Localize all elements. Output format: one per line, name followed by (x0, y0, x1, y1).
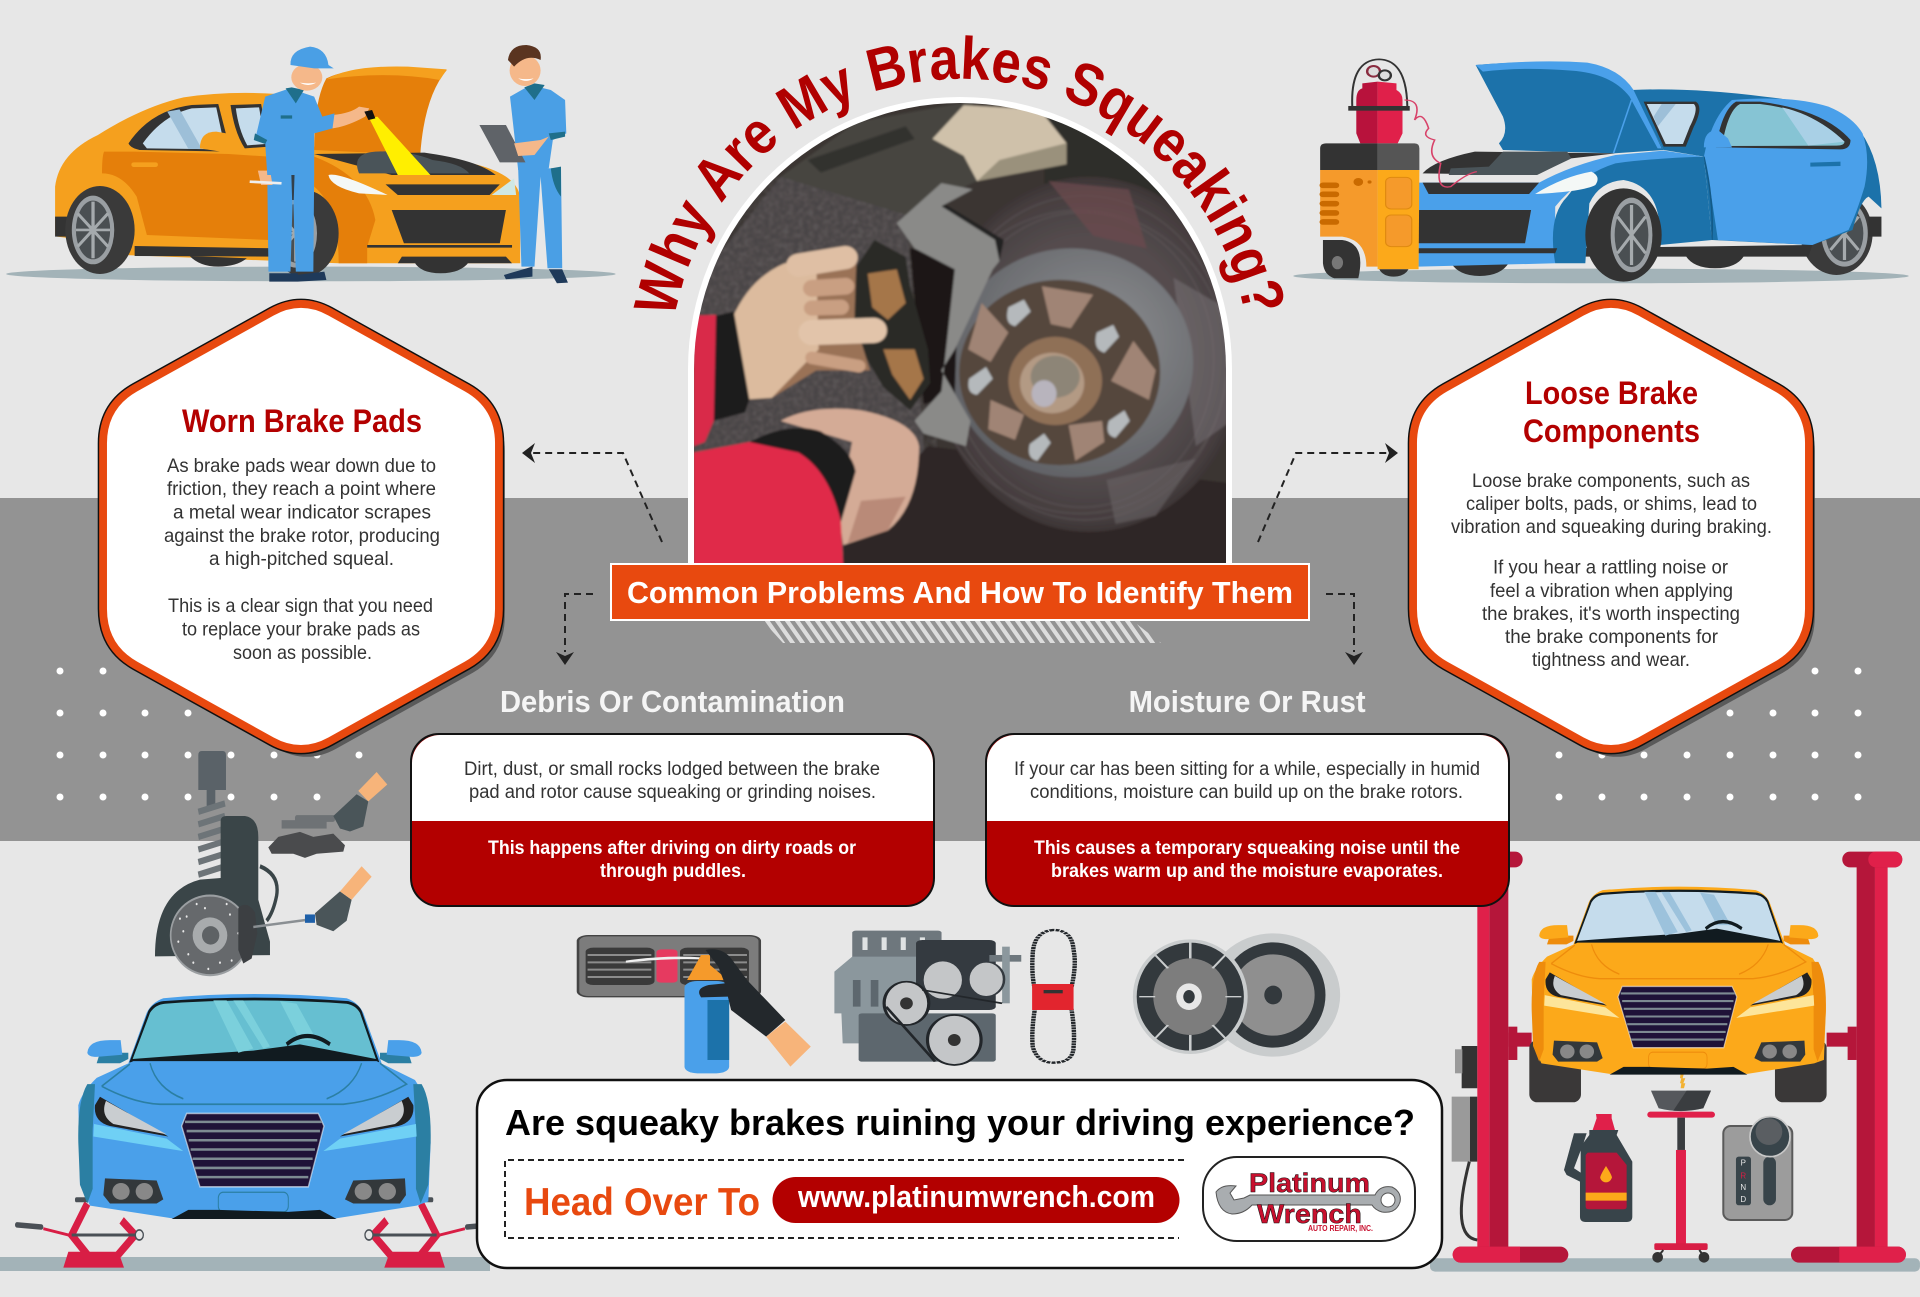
panel: worn brake pads hexagon (103, 304, 505, 757)
card: moisture: If your car has been sitting for a while, especially in humid (1014, 759, 1480, 780)
panel: loose brake components hexagon (1413, 304, 1815, 757)
dot grid left (56, 668, 362, 800)
illustration: blue car with AC service cart (1293, 59, 1909, 283)
dot grid right (1556, 668, 1862, 800)
text: worn brake pads description: against the brake rotor, producing (164, 525, 440, 547)
text: worn brake pads description (164, 455, 440, 664)
text: question: Are squeaky brakes ruining your driving experience? (505, 1102, 1415, 1143)
banner: common problems (611, 564, 1309, 620)
illustration: blue car on jacks (0, 994, 493, 1271)
arrow: banner to moisture (1326, 594, 1363, 665)
logo: platinum wrench: AUTO REPAIR, INC. (1308, 1224, 1373, 1233)
text: loose brake components description: the brakes, it's worth inspecting (1482, 603, 1740, 625)
illustration: car lift with yellow car: P (1741, 1158, 1746, 1167)
card: debris (411, 734, 934, 906)
heading: loose brake components (1523, 375, 1700, 449)
grey band (0, 498, 1920, 841)
text: loose brake components description: caliper bolts, pads, or shims, lead to (1466, 493, 1757, 515)
icon: spray can at dashboard vent (578, 936, 811, 1073)
text: loose brake components description: If you hear a rattling noise or (1493, 556, 1728, 578)
text: loose brake components description: feel a vibration when applying (1490, 580, 1733, 602)
panel: moisture or rust (986, 684, 1509, 906)
text: worn brake pads description: soon as possible. (233, 642, 372, 664)
arrow: banner to debris (556, 594, 593, 665)
text: worn brake pads description: a high-pitched squeal. (209, 548, 394, 570)
photo arch: hands replacing brake pad (687, 97, 1245, 568)
text: loose brake components description (1451, 470, 1772, 671)
logo: platinum wrench (1203, 1157, 1415, 1241)
card: debris: through puddles. (600, 861, 746, 882)
heading: loose brake components: Loose Brake (1525, 375, 1698, 411)
heading: moisture: Moisture Or Rust (1129, 684, 1366, 719)
card: debris: Dirt, dust, or small rocks lodged between the brake (464, 759, 880, 780)
card: moisture: This causes a temporary squeaking noise until the (1034, 838, 1460, 859)
banner: common problems: Common Problems And How To Identify Them (627, 575, 1293, 610)
card: moisture: conditions, moisture can build up on the brake rotors. (1030, 782, 1463, 803)
card: moisture (986, 734, 1509, 906)
text: loose brake components description: vibration and squeaking during braking. (1451, 516, 1772, 538)
panel: debris or contamination (411, 684, 934, 906)
arrow: centre to worn brake pads (522, 443, 662, 542)
dashed frame (505, 1160, 1184, 1238)
text: worn brake pads description: to replace your brake pads as (182, 618, 420, 640)
text: worn brake pads description: friction, they reach a point where (167, 478, 436, 500)
heading: worn brake pads: Worn Brake Pads (182, 403, 422, 439)
text: loose brake components description: tightness and wear. (1532, 649, 1690, 671)
url pill: www.platinumwrench.com (797, 1179, 1155, 1214)
heading: debris: Debris Or Contamination (500, 684, 845, 719)
text: head over to: Head Over To (524, 1181, 760, 1224)
text: loose brake components description: Loose brake components, such as (1472, 470, 1750, 492)
card: debris: pad and rotor cause squeaking or grinding noises. (469, 782, 876, 803)
hatch decoration under banner (763, 621, 1161, 643)
illustration: mechanics inspecting orange car (6, 45, 616, 283)
illustration: brake assembly with gloved hands (155, 751, 387, 975)
title on arc: Why Are My Brakes Squeaking? (634, 35, 1284, 310)
illustration: car lift with yellow car: N (1740, 1183, 1746, 1192)
text: worn brake pads description: a metal wear indicator scrapes (173, 502, 431, 524)
logo: platinum wrench: Platinum (1249, 1168, 1370, 1198)
logo: platinum wrench: Wrench (1257, 1199, 1362, 1229)
panel: call to action (477, 1080, 1442, 1268)
illustration: car lift with yellow car (1430, 852, 1920, 1272)
card: debris: This happens after driving on dirty roads or (488, 838, 857, 859)
text: worn brake pads description: As brake pads wear down due to (167, 455, 436, 477)
icon: engine and belt (834, 930, 1075, 1065)
text: loose brake components description: the brake components for (1505, 626, 1718, 648)
heading: loose brake components: Components (1523, 413, 1700, 449)
illustration: car lift with yellow car: D (1740, 1195, 1746, 1204)
icon: clutch plates (1133, 933, 1340, 1057)
card: moisture: brakes warm up and the moisture evaporates. (1051, 861, 1443, 882)
illustration: car lift with yellow car: R (1740, 1172, 1746, 1181)
text: worn brake pads description: This is a clear sign that you need (168, 595, 433, 617)
arrow: centre to loose brake components (1258, 443, 1398, 542)
